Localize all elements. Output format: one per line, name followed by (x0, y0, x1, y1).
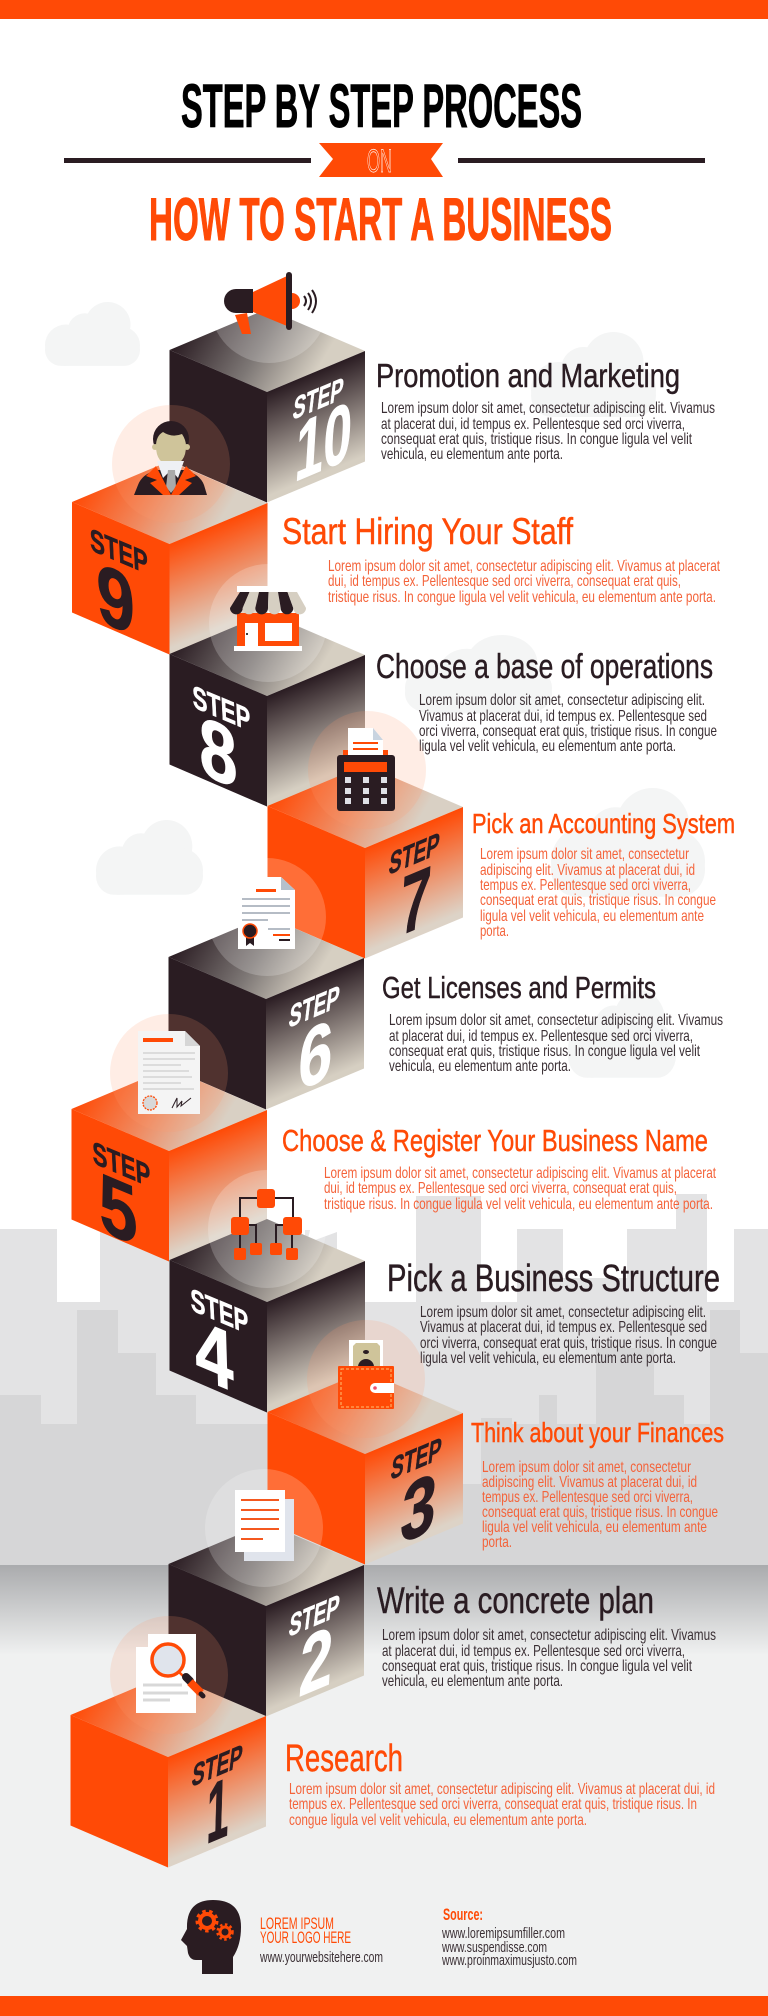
description: adipiscing elit. Vivamus at placerat dui, id (480, 862, 695, 879)
footer sources: www.loremipsumfiller.com (441, 1925, 565, 1942)
divider with ribbon: ON (367, 143, 392, 179)
description: Lorem ipsum dolor sit amet, consectetur (482, 1459, 691, 1476)
description (382, 1627, 716, 1690)
cube 9 (72, 461, 268, 654)
cube 7: STEP (387, 826, 441, 883)
description: adipiscing elit. Vivamus at placerat dui, id (482, 1474, 697, 1491)
cube 7 (268, 765, 463, 958)
heading: Start Hiring Your Staff (282, 511, 574, 552)
step 2: write a concrete plan (168, 1469, 716, 1716)
description (381, 400, 715, 463)
heading: Write a concrete plan (377, 1580, 654, 1621)
cube 6: 6 (296, 1001, 336, 1109)
cube 1 (70, 1674, 266, 1868)
divider with ribbon (64, 143, 705, 179)
cube 8: 8 (198, 697, 239, 807)
cube 3: STEP (389, 1431, 443, 1488)
cube 10: 10 (293, 383, 355, 500)
cube 7: 7 (398, 848, 434, 954)
cube 8: STEP (192, 679, 251, 739)
description (324, 1165, 716, 1213)
step 3: think about your finances (268, 1320, 724, 1564)
footer company text (259, 1914, 383, 1966)
description: vehicula, eu elementum ante porta. (382, 1673, 563, 1690)
description: vehicula, eu elementum ante porta. (389, 1058, 571, 1075)
bottom bar (0, 1996, 768, 2016)
description: tempus ex. Pellentesque sed orci viverra, (482, 1489, 693, 1506)
footer company text: YOUR LOGO HERE (260, 1928, 351, 1947)
cube 1: 1 (205, 1759, 230, 1862)
description: ligula vel velit vehicula, eu elementum ante porta. (420, 1350, 676, 1367)
cube 4: 4 (194, 1300, 235, 1410)
cube 9: 9 (95, 544, 136, 654)
step 8: choose a base of operations (170, 564, 717, 807)
cube 4: STEP (190, 1282, 249, 1342)
heading: Promotion and Marketing (376, 357, 680, 394)
description (420, 1304, 717, 1367)
cube 2 (168, 1523, 364, 1716)
description: porta. (482, 1534, 512, 1551)
heading: Research (285, 1738, 403, 1780)
icon: certificate (208, 858, 326, 976)
step 6: get licenses and permits (168, 858, 723, 1110)
cube 10: STEP (291, 371, 345, 428)
footer sources: www.suspendisse.com (441, 1939, 547, 1956)
cube 2: STEP (287, 1588, 341, 1645)
step 10: promotion and marketing (170, 245, 715, 502)
icon: magnifier on paper (110, 1616, 228, 1734)
icon: shop (209, 564, 327, 682)
cube 8 (170, 613, 365, 807)
icon: documents (205, 1469, 323, 1587)
description (328, 558, 720, 606)
description: porta. (480, 923, 509, 940)
cube 3 (268, 1371, 463, 1564)
logo: head with gears (181, 1900, 241, 1974)
footer sources: Source: (443, 1905, 483, 1924)
icon: org chart (208, 1170, 326, 1288)
description: congue ligula vel velit vehicula, eu elementum ante porta. (289, 1812, 587, 1829)
description (419, 692, 717, 755)
description: tempus ex. Pellentesque sed orci viverra, (480, 877, 691, 894)
description (389, 1012, 723, 1075)
footer company text: www.yourwebsitehere.com (259, 1949, 383, 1966)
cube 2: 2 (297, 1607, 336, 1715)
cube 9: STEP (89, 522, 149, 582)
footer company text: LOREM IPSUM (260, 1914, 334, 1933)
cube 1: STEP (190, 1738, 244, 1795)
description (482, 1459, 718, 1551)
cube 6: STEP (287, 979, 341, 1036)
ground gradient (0, 1565, 768, 2016)
cube 6 (168, 916, 364, 1110)
description (480, 846, 716, 940)
top bar (0, 0, 768, 19)
icon: calculator (308, 711, 426, 829)
icon: megaphone (210, 245, 328, 363)
city skyline background (0, 1194, 768, 1565)
icon: wallet (307, 1320, 425, 1438)
step 5: choose and register your business name (72, 1014, 716, 1264)
description: vehicula, eu elementum ante porta. (381, 446, 563, 463)
footer sources (441, 1905, 577, 1969)
step 4: pick a business structure (170, 1170, 720, 1412)
cube 10 (170, 309, 365, 502)
step 1: research (70, 1616, 715, 1868)
cube 5: STEP (92, 1135, 151, 1195)
description: ligula vel velit vehicula, eu elementum ante porta. (419, 738, 676, 755)
cube 4 (170, 1219, 365, 1412)
cube 5: 5 (98, 1154, 139, 1264)
description (289, 1781, 715, 1829)
description: Lorem ipsum dolor sit amet, consectetur (480, 846, 689, 863)
icon: contract (110, 1014, 228, 1132)
heading: Get Licenses and Permits (382, 970, 656, 1005)
step 7: pick an accounting system (268, 711, 735, 958)
footer sources: www.proinmaximusjusto.com (441, 1952, 577, 1969)
clouds (45, 302, 705, 1078)
cube 5 (72, 1068, 267, 1264)
cube 3: 3 (398, 1454, 440, 1562)
step 9: start hiring your staff (72, 405, 720, 654)
icon: businessman (112, 405, 230, 523)
